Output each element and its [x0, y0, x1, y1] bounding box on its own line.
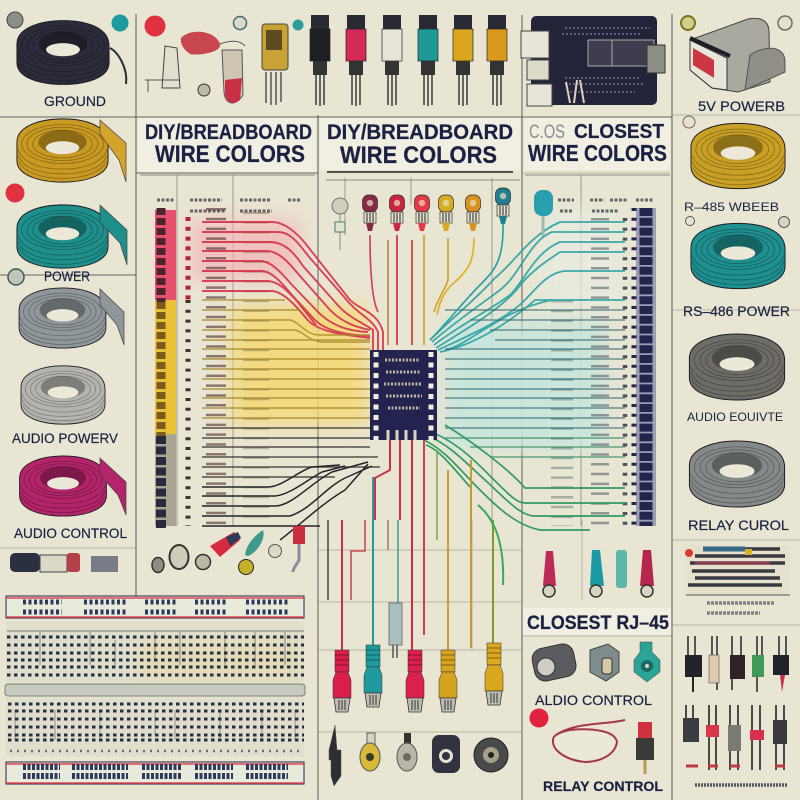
wires from chip downward	[328, 440, 503, 650]
table header marks	[558, 200, 654, 211]
small caption marks bottom right	[695, 783, 788, 787]
badge teal	[292, 20, 304, 30]
heading: DIY/Breadboard wire colors (centre): DIY/BREADBOARD	[327, 121, 513, 144]
plug magenta	[543, 551, 556, 597]
connector bright red	[414, 195, 430, 231]
plug teal	[364, 645, 382, 707]
connector red	[390, 195, 404, 231]
bottom icons	[329, 725, 508, 786]
spool: ground	[7, 12, 128, 109]
label: relay control: RELAY CONTROL	[543, 778, 663, 794]
spool: rs-485 wire	[683, 116, 785, 214]
heading: DIY/Breadboard wire colors (left): DIY/BREADBOARD	[145, 121, 312, 144]
table header marks	[157, 200, 300, 211]
heading: DIY/Breadboard wire colors (left): WIRE COLORS	[155, 141, 305, 168]
spool: relay control: RELAY CUROL	[688, 517, 789, 533]
colour strip	[636, 208, 656, 526]
bottom plug row	[333, 603, 503, 712]
spool: grey	[19, 288, 124, 348]
icon: teal jack	[634, 642, 660, 682]
heading: closest wire colors (right): C.OS	[529, 122, 565, 143]
grey connector	[389, 603, 402, 658]
connector yellow	[438, 195, 454, 231]
sketched gold connector	[262, 24, 288, 105]
plug yellow	[439, 650, 457, 712]
plug red two	[406, 650, 424, 712]
heading: closest wire colors (right): CLOSEST	[574, 121, 664, 143]
board centre channel	[5, 684, 305, 696]
row text marks	[206, 208, 226, 526]
spool: audio power: AUDIO POWERV	[12, 430, 119, 446]
heading: DIY/Breadboard wire colors (centre)	[320, 118, 520, 172]
single-board computer illustration	[521, 16, 665, 106]
icon: round socket	[474, 738, 508, 772]
sketched red connector	[145, 32, 245, 103]
breadboard	[5, 596, 305, 784]
connector teal	[496, 188, 510, 224]
connector grey	[332, 198, 348, 250]
spool: ground: GROUND	[44, 93, 106, 109]
connector magenta	[362, 195, 378, 231]
heading: closest wire colors (right): WIRE COLORS	[528, 140, 667, 166]
spool: teal power: POWER	[44, 268, 90, 284]
right column: wire spools	[683, 116, 790, 533]
left wire table	[155, 200, 383, 540]
icon: grey jack	[397, 733, 417, 771]
small caption marks	[707, 603, 775, 613]
small plugs over Closest RJ-45	[543, 550, 654, 597]
yellow wires	[202, 300, 370, 418]
relay control illustration	[530, 708, 654, 774]
plug light teal	[616, 550, 627, 588]
row text marks	[591, 218, 609, 526]
plug yellow two	[487, 15, 507, 106]
plug yellow	[453, 15, 473, 106]
pin dots	[186, 217, 190, 300]
board holes lower	[6, 698, 304, 756]
wires from chip upward	[370, 222, 503, 345]
heading: DIY/Breadboard wire colors (centre): WIRE COLORS	[340, 142, 497, 169]
upper plug row	[685, 636, 789, 692]
spool: rs-485 power: RS–486 POWER	[683, 303, 790, 319]
plug black	[310, 15, 330, 106]
washes behind the wire table	[190, 210, 620, 450]
heading: DIY/Breadboard wire colors (left)	[138, 118, 316, 172]
badge red	[144, 16, 166, 36]
plug teal	[418, 15, 438, 106]
plug crimson	[640, 550, 654, 597]
relay plug grid	[683, 636, 789, 770]
top power rail	[6, 596, 304, 618]
spool: relay control	[688, 441, 789, 533]
spool: teal power	[6, 184, 127, 285]
spool: audio cable	[687, 334, 785, 424]
spool: audio power	[12, 366, 119, 446]
connector row	[10, 553, 118, 572]
right wire table	[424, 200, 656, 530]
badge pale	[234, 16, 246, 30]
central chip	[370, 350, 437, 440]
spool: audio control	[14, 456, 127, 541]
colour strip	[155, 210, 176, 302]
heading: Closest RJ-45: CLOSEST RJ–45	[527, 613, 669, 634]
relay mini chart	[685, 545, 790, 595]
dark wires	[202, 428, 380, 477]
lower plug row	[683, 705, 787, 770]
pin dots	[623, 218, 627, 526]
teal wires	[430, 222, 625, 352]
spool: yellow	[17, 119, 126, 182]
plug red	[333, 650, 351, 712]
heading: closest wire colors (right)	[524, 118, 670, 170]
spool: audio cable: AUDIO EOUIVTE	[687, 410, 783, 424]
spool: audio control: AUDIO CONTROL	[14, 525, 127, 541]
icon: cube jack	[590, 644, 619, 681]
tall connectors along the top	[310, 15, 507, 106]
audio control icons	[530, 642, 660, 683]
left column: wire spools	[6, 12, 128, 572]
plug teal	[590, 550, 604, 597]
icon: pin	[329, 725, 341, 786]
connector amber	[466, 195, 480, 231]
connector teal large	[534, 190, 553, 236]
red wires	[202, 222, 383, 352]
top sketches panel	[144, 16, 304, 105]
plug red	[346, 15, 366, 106]
bottom power rail	[6, 762, 304, 784]
spool: rs-485 power	[683, 216, 790, 319]
spool: rs-485 wire: R–485 WBEEB	[684, 200, 779, 214]
board holes upper	[6, 622, 304, 682]
plug yellow two	[485, 643, 503, 705]
right column: 5V power block	[681, 16, 792, 114]
horizontal table wires	[445, 310, 625, 428]
connector row under left table	[152, 526, 305, 574]
icon: yellow jack	[360, 733, 380, 771]
small connector heads over the table	[332, 188, 553, 250]
label: audio control: ALDIO CONTROL	[535, 692, 652, 708]
green wires	[424, 425, 625, 530]
right column: 5V power block: 5V POWERB	[698, 98, 785, 114]
plug white	[382, 15, 402, 106]
icon: speaker jack	[530, 642, 578, 683]
icon: dark socket	[432, 735, 460, 773]
